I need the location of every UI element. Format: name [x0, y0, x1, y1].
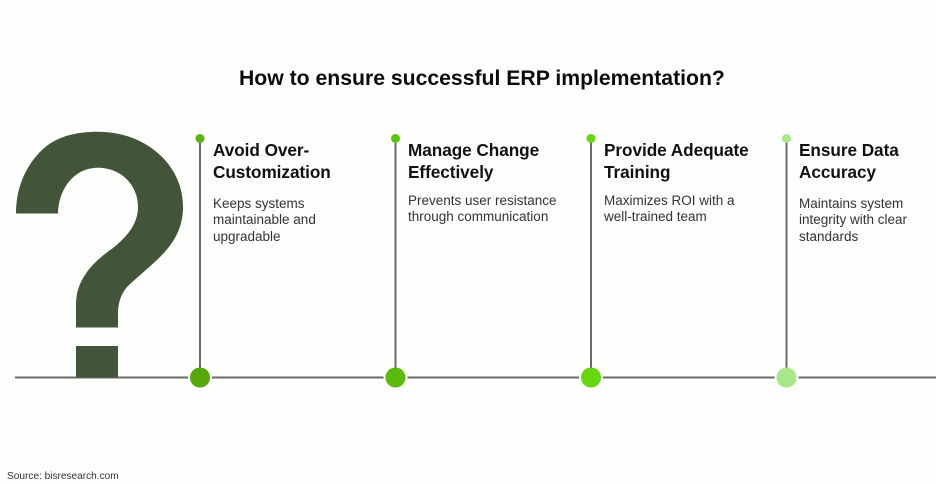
heading: step 3: Provide Adequate	[604, 140, 749, 160]
icon: question mark	[16, 132, 183, 378]
heading: step 3	[604, 140, 749, 182]
text: step 4: integrity with clear	[799, 212, 907, 227]
heading: step 1: Customization	[213, 162, 331, 182]
text: step 4: Maintains system	[799, 196, 903, 211]
marker: step 4	[774, 134, 798, 390]
text: step 1: Keeps systems	[213, 196, 305, 211]
text: step 2: through communication	[408, 209, 548, 224]
heading: step 2: Manage Change	[408, 140, 539, 160]
baseline axis	[15, 376, 936, 378]
marker: step 3	[579, 134, 603, 390]
text: step 3: Maximizes ROI with a	[604, 193, 735, 208]
text: step 1	[213, 196, 316, 244]
heading: step 1: Avoid Over-	[213, 140, 309, 160]
text: step 2	[408, 193, 557, 224]
heading: step 4: Ensure Data	[799, 140, 899, 160]
heading: step 2: Effectively	[408, 162, 493, 182]
heading: step 4	[799, 140, 899, 182]
text: step 1: maintainable and	[213, 212, 316, 227]
title: How to ensure successful ERP implementation?	[239, 67, 725, 90]
marker: step 1	[188, 134, 212, 390]
text: step 4: standards	[799, 229, 858, 244]
heading: step 4: Accuracy	[799, 162, 876, 182]
heading: step 2	[408, 140, 539, 182]
source note: Source: bisresearch.com	[7, 471, 119, 482]
heading: step 3: Training	[604, 162, 670, 182]
heading: step 1	[213, 140, 331, 182]
text: step 3	[604, 193, 735, 224]
marker: step 2	[384, 134, 408, 390]
text: step 3: well-trained team	[604, 209, 707, 224]
text: step 2: Prevents user resistance	[408, 193, 557, 208]
text: step 4	[799, 196, 907, 244]
text: step 1: upgradable	[213, 229, 281, 244]
